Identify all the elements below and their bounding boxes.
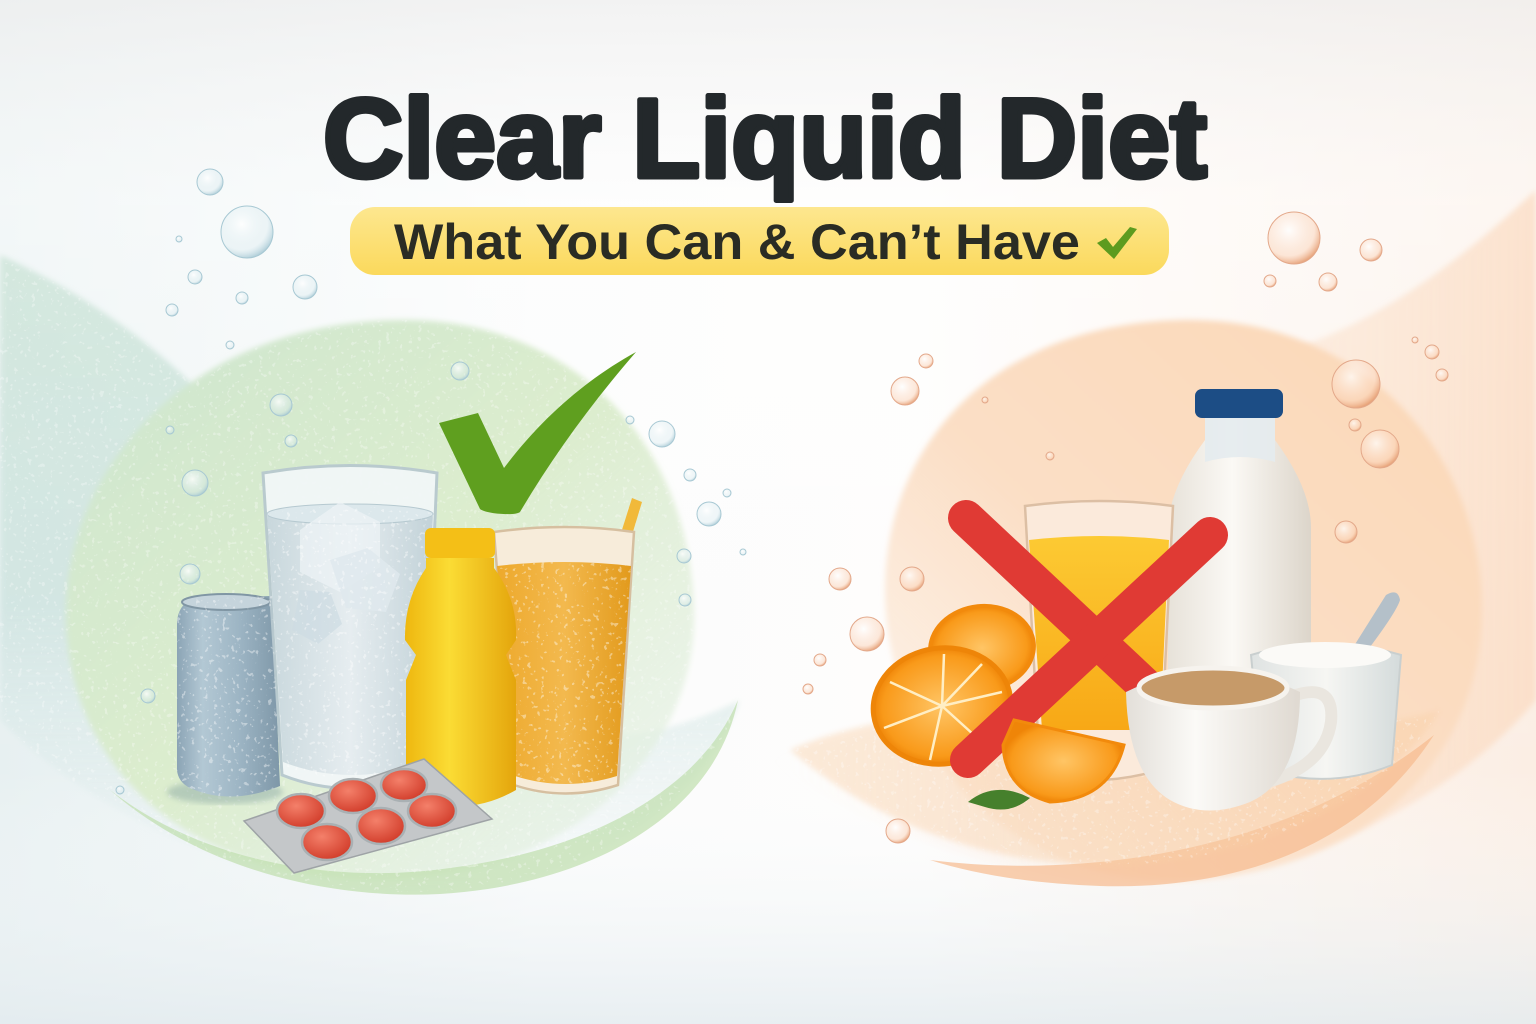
- item: soda can: [167, 594, 283, 804]
- subtitle pill: [350, 207, 1169, 275]
- item: yellow sports bottle: [405, 528, 516, 806]
- texture: right table speckle: [796, 712, 1439, 865]
- item: apple juice glass with straw: [494, 498, 642, 794]
- icon: small check: [1097, 227, 1137, 259]
- texture: left water speckle: [0, 250, 760, 910]
- item: orange wedge: [1003, 720, 1124, 802]
- right background wave: [770, 190, 1536, 883]
- item: orange juice glass: [1025, 501, 1173, 780]
- left background wave: [0, 255, 740, 892]
- subtitle text: What You Can & Can’t Have: [394, 214, 1080, 270]
- item: orange halves: [866, 601, 1038, 773]
- bubbles: left: [116, 169, 746, 794]
- panel: green swoosh: [110, 700, 738, 895]
- item: blister pack of red pills: [244, 759, 492, 873]
- panel: orange swoosh: [930, 735, 1434, 886]
- icon: green check mark: [439, 352, 636, 514]
- panel: allowed green circle: [66, 320, 694, 880]
- icon: red cross: [966, 518, 1210, 760]
- item: coffee cup: [1126, 668, 1331, 811]
- panel: not allowed orange circle: [885, 320, 1482, 880]
- texture: condensation droplets: [177, 507, 631, 796]
- item: water glass with ice: [263, 466, 437, 788]
- item: leaf: [968, 790, 1030, 810]
- item: yogurt jar with spoon: [1251, 592, 1401, 779]
- bubbles: right: [803, 212, 1448, 843]
- title: Clear Liquid Diet: [323, 76, 1207, 201]
- panel: orange table surface: [790, 710, 1440, 865]
- item: milk bottle: [1168, 389, 1311, 680]
